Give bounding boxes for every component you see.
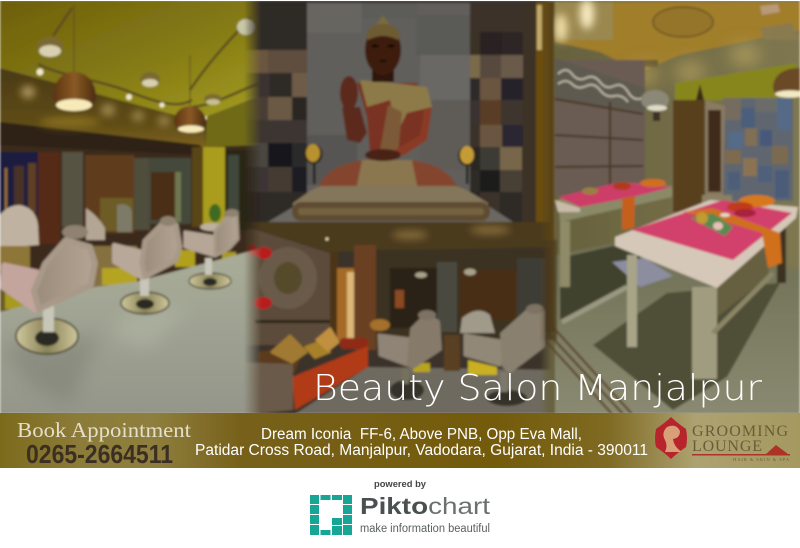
footer banner [0,413,800,469]
panel: salon chairs photo [0,0,262,414]
statue: head [365,15,401,82]
back row chairs [0,204,132,248]
lounge chair: back [460,311,495,333]
grey armchair corner [240,362,293,414]
piktochart logo [310,493,491,535]
red sofa [258,329,368,410]
photo collage [0,0,800,414]
red flowers [247,244,272,309]
track lighting [38,5,258,107]
piktochart tagline: make information beautiful [360,523,490,535]
logo: wordmark [692,423,790,462]
logo: red rule and roof [692,445,790,456]
lounge side table [444,335,460,371]
floor reflections [10,315,166,396]
address [195,426,648,459]
ceiling spotlights [36,19,255,108]
logo: red emblem [655,417,687,459]
statue: gold robe [360,80,432,133]
pendant lamp small [174,106,206,133]
title: Beauty Salon Manjalpur [313,368,762,409]
grey stone niche [306,2,472,193]
stone wall right [470,2,550,227]
phone number: 0265-2664511 [26,439,173,469]
yellow-green backlit panel [675,63,797,102]
ceiling [0,0,262,116]
display shelf [268,207,513,222]
buddha statue [292,15,490,221]
left and right lamps [304,144,476,184]
book appointment label: Book Appointment [17,418,191,442]
powered by label: powered by [374,479,427,490]
light floor ledge [562,287,627,322]
address: Dream Iconia FF-6, Above PNB, Opp Eva Mall, [261,426,582,443]
floor mat shadow [593,283,780,410]
salon chair: middle [114,216,180,314]
lounge back wall [375,250,545,350]
wall glow spots [633,47,759,83]
back massage table [555,179,672,287]
lounge ceiling [240,222,550,252]
tiled floor [0,248,262,414]
statue: robe center folds [356,160,418,190]
salon chair: back [185,209,239,289]
logo: wordmark: HAIR & SKIN & SPA [733,457,790,462]
statue: folded hands [365,149,401,161]
statue: torso [357,83,430,153]
pendant lamp [773,68,800,98]
wall lamp [641,90,669,121]
front massage table [615,195,798,379]
padded headboard wall [555,58,645,195]
logo: wordmark: GROOMING [692,423,788,440]
lit spots on bulkhead [21,86,170,127]
statue: crossed legs [317,160,460,192]
lounge mirror wall [240,225,376,350]
logo: wordmark: LOUNGE [692,438,762,455]
wall and mirrors [0,66,261,292]
statue: raised hand and arm [340,76,367,143]
wooden cabinet [673,84,732,212]
salon chair: front [2,225,95,354]
orange flowers [370,319,390,331]
counters with yellow glow [0,246,236,312]
statue: left arm [395,108,432,156]
glass door post [540,1,558,340]
address: Patidar Cross Road, Manjalpur, Vadodara, Gujarat, India - 390011 [195,442,648,459]
lounge floor [295,367,560,414]
piktochart wordmark: Pikto chart [360,493,491,519]
panel: massage tables photo [535,0,800,414]
panel: buddha and lounge photo [240,0,560,414]
piktochart mosaic icon [310,495,352,535]
stone wall left [247,2,308,221]
grooming lounge logo [655,417,790,462]
patterned rug [560,240,673,320]
lounge chair: left [379,310,440,400]
floor inlay stripes [543,326,632,414]
lounge chair: right [465,304,544,406]
spa ceiling [555,0,800,72]
spa floor [555,238,800,414]
blue stone wall [723,98,793,201]
statue: draped cloth [293,186,488,208]
pendant lamp large [53,72,96,111]
statue: ornate base [292,202,490,221]
